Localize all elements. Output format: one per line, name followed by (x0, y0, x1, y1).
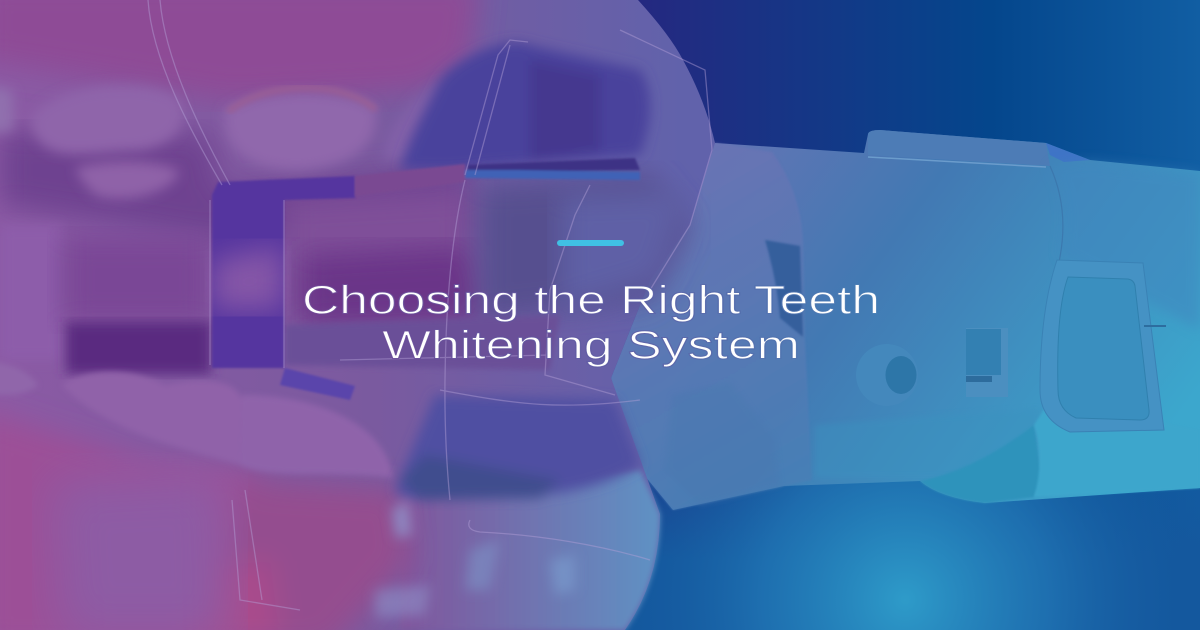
title: Whitening System (382, 324, 800, 368)
upper mid darkness (0, 130, 470, 240)
title (302, 278, 880, 368)
gum strip and blue strip (355, 158, 640, 196)
device round port (856, 344, 918, 406)
mouth tray and teeth (0, 0, 715, 630)
side panel (1050, 162, 1200, 330)
lower gum (0, 410, 410, 630)
gel highlights (375, 500, 575, 618)
blue gel lower (395, 395, 640, 500)
reflection on gum (50, 470, 230, 630)
lower tray pale area (400, 470, 660, 630)
upper teeth (0, 82, 445, 199)
blue strip on device top (1046, 143, 1090, 162)
small lower blue strip (280, 368, 355, 400)
mouth interior (0, 175, 690, 374)
gum area upper (0, 0, 480, 100)
device body (611, 130, 1200, 510)
device head cap (611, 143, 812, 510)
head facet (665, 382, 780, 505)
gum arc above tooth (228, 88, 376, 112)
device latch (966, 328, 1008, 397)
button frame (1040, 260, 1164, 432)
tray base (0, 0, 715, 630)
lower teeth (0, 360, 393, 478)
blue gel upper (400, 42, 650, 170)
clear tray lines (148, 0, 712, 610)
title accent bar (557, 240, 624, 246)
device top ridge (868, 130, 1050, 166)
lower body band (815, 408, 1040, 478)
collar (920, 425, 1042, 503)
title: Choosing the Right Teeth (302, 278, 880, 322)
purple rod (212, 176, 355, 368)
whitening device (611, 130, 1200, 510)
button (1058, 277, 1149, 420)
head slot (765, 240, 803, 337)
